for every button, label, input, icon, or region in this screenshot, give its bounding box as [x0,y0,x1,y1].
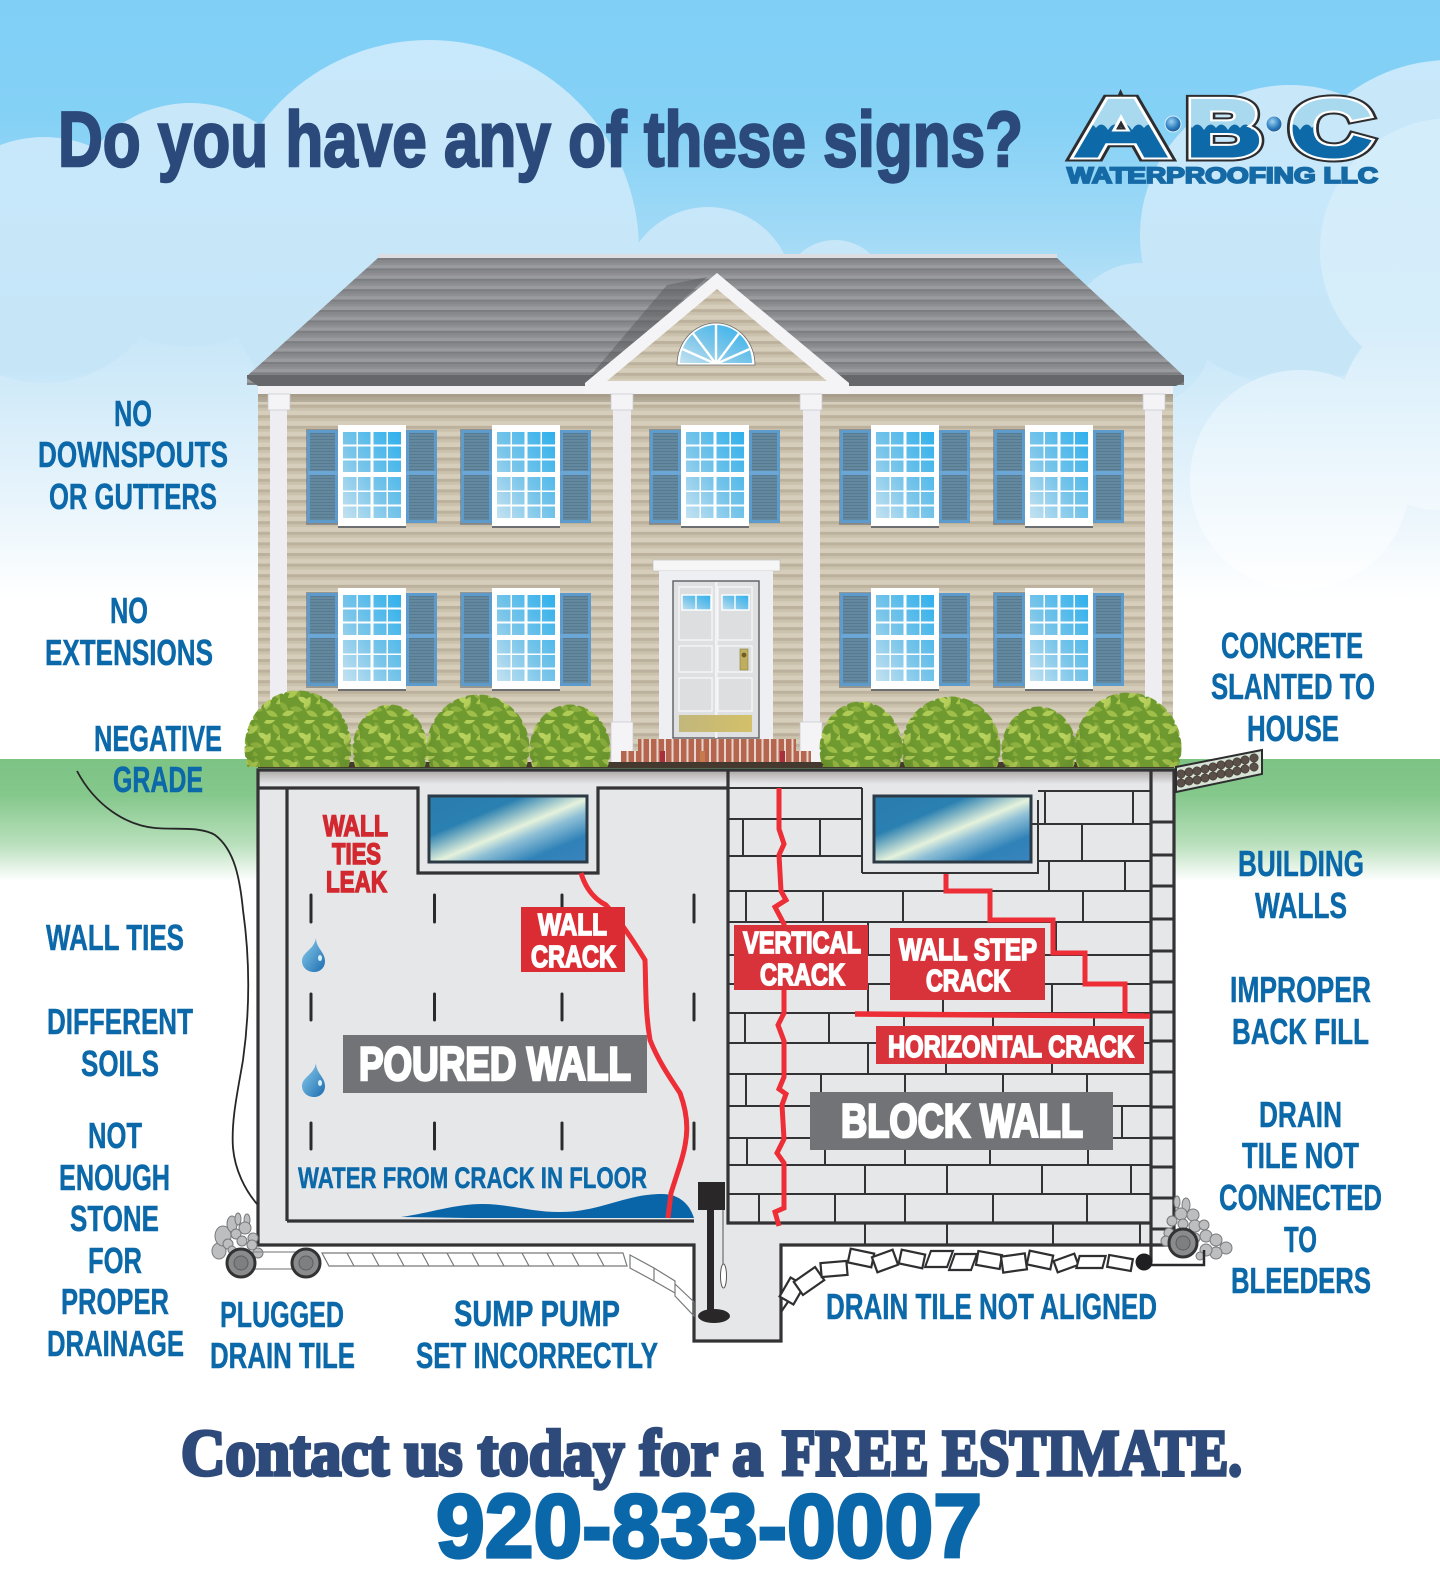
label: different soils [47,1001,193,1084]
logo: ABC Waterproofing LLC: C [1290,84,1372,174]
step crack [946,874,1125,1015]
label: different soils: DIFFERENT [47,1001,193,1042]
label: wall ties: WALL TIES [46,917,184,958]
label: negative grade [94,718,222,800]
sump pump [698,1182,730,1323]
logo: ABC Waterproofing LLC: A [1074,84,1168,174]
siding wall [258,394,1173,766]
shrubs [244,690,1182,767]
label: concrete slanted to house: SLANTED TO [1211,666,1375,707]
front door [653,560,780,739]
block wall courses [728,788,1173,1244]
label: no downspouts or gutters [38,393,228,517]
logo: ABC Waterproofing LLC: B [1186,84,1262,174]
wall ties leak label: LEAK [326,866,387,899]
horizontal crack label: HORIZONTAL CRACK [888,1029,1134,1064]
sky background [0,0,1440,600]
gravel pile left [212,1213,263,1259]
label: drain tile not connected to bleeders: BLEEDERS [1231,1260,1371,1301]
label: drain tile not connected to bleeders: TILE NOT [1242,1135,1359,1176]
phone number: 920-833-0007 [436,1477,982,1577]
negative grade soil line [77,771,257,1204]
label: improper back fill: BACK FILL [1232,1011,1369,1052]
logo: ABC Waterproofing LLC: C [1290,84,1372,174]
wall crack label [521,907,625,974]
wall ties [311,895,694,1149]
upper row windows [306,425,1123,528]
fan window [677,322,755,365]
label: not enough stone for proper drainage: STONE [70,1198,159,1239]
wall crack label: CRACK [531,939,616,974]
poured wall window [429,796,587,862]
label: building walls [1238,843,1364,926]
basement wall fills [258,770,1174,1341]
house upper structure [246,254,1184,804]
label: not enough stone for proper drainage: PROPER [61,1281,169,1322]
brick front steps [621,739,811,763]
logo: ABC Waterproofing LLC: C [1290,84,1372,174]
label: no extensions [45,590,213,673]
label: negative grade: NEGATIVE [94,718,222,759]
label: different soils: SOILS [81,1043,159,1084]
horizontal crack [855,1014,1150,1016]
poured wall label: POURED WALL [359,1037,631,1090]
label: no downspouts or gutters: DOWNSPOUTS [38,434,228,475]
logo: ABC Waterproofing LLC: WATERPROOFING LLC [1067,163,1378,188]
label: plugged drain tile: PLUGGED [220,1294,344,1335]
logo: ABC Waterproofing LLC: B [1186,84,1262,174]
ground: grass band [0,759,1440,881]
label: building walls: BUILDING [1238,843,1364,884]
label: plugged drain tile: DRAIN TILE [210,1335,355,1376]
basement outlines [258,770,1174,1341]
label: no extensions: EXTENSIONS [45,632,213,673]
vertical crack label: CRACK [760,957,845,992]
logo: ABC Waterproofing LLC: A [1074,84,1168,174]
roof [247,254,1184,386]
label: drain tile not connected to bleeders: TO [1284,1219,1317,1260]
label: concrete slanted to house: HOUSE [1247,708,1339,749]
block wall window [874,796,1031,862]
label: no extensions: NO [110,590,148,631]
vertical crack label: VERTICAL [743,925,861,960]
label: concrete slanted to house: CONCRETE [1221,625,1363,666]
wall crack label: WALL [538,907,607,942]
misaligned drain tile right [780,1249,1133,1312]
vertical crack [775,788,786,1226]
label: not enough stone for proper drainage: ENOUGH [59,1157,170,1198]
ground sill [258,762,1174,768]
wall step crack label [890,928,1045,1000]
label: no downspouts or gutters: OR GUTTERS [49,476,217,517]
fascia trim [258,386,1173,394]
call to action [181,1417,1242,1490]
plugged drain tile left [212,1213,694,1316]
label: negative grade: GRADE [113,759,203,800]
label: drain tile not aligned: DRAIN TILE NOT ALIGNED [826,1286,1157,1327]
logo: ABC Waterproofing LLC: B [1186,84,1262,174]
label: plugged drain tile [210,1294,355,1376]
label: sump pump set incorrectly [416,1293,658,1376]
label: improper back fill [1230,969,1371,1052]
label: not enough stone for proper drainage: DRAINAGE [47,1323,184,1364]
logo: ABC Waterproofing LLC: A [1074,84,1168,174]
title: Do you have any of these signs? [58,95,1023,183]
label: not enough stone for proper drainage: FOR [88,1240,142,1281]
concrete slab slanted to house [1176,750,1262,792]
water from crack label: WATER FROM CRACK IN FLOOR [298,1162,647,1195]
call to action: FREE ESTIMATE. [782,1417,1242,1490]
gravel pile right [1161,1196,1232,1260]
wall ties leak label [323,810,388,899]
water on floor [401,1194,694,1218]
lower row windows [306,588,1123,691]
gable pediment [585,273,849,394]
label: not enough stone for proper drainage: NOT [88,1115,142,1156]
label: sump pump set incorrectly: SET INCORRECTLY [416,1335,658,1376]
label: building walls: WALLS [1255,885,1347,926]
wall ties leak label: WALL [323,810,388,843]
columns [268,394,1165,766]
wall ties leak label: TIES [332,838,381,871]
label: drain tile not connected to bleeders: DRAIN [1259,1094,1342,1135]
block wall label: BLOCK WALL [841,1094,1083,1147]
poured wall crack [581,873,687,1218]
call to action: Contact us today for a [181,1417,763,1490]
clouds [0,40,1440,590]
label: improper back fill: IMPROPER [1230,969,1371,1010]
logo: ABC Waterproofing LLC [1067,84,1378,188]
drain pipe and gravel right [1136,1196,1232,1270]
label: not enough stone for proper drainage [47,1115,184,1364]
wall step crack label: CRACK [926,963,1010,998]
label: concrete slanted to house [1211,625,1375,749]
label: no downspouts or gutters: NO [114,393,152,434]
wall step crack label: WALL STEP [899,932,1037,967]
vertical crack label [734,925,868,992]
label: drain tile not connected to bleeders [1219,1094,1382,1301]
label: sump pump set incorrectly: SUMP PUMP [454,1293,620,1334]
water droplets [302,938,325,1097]
